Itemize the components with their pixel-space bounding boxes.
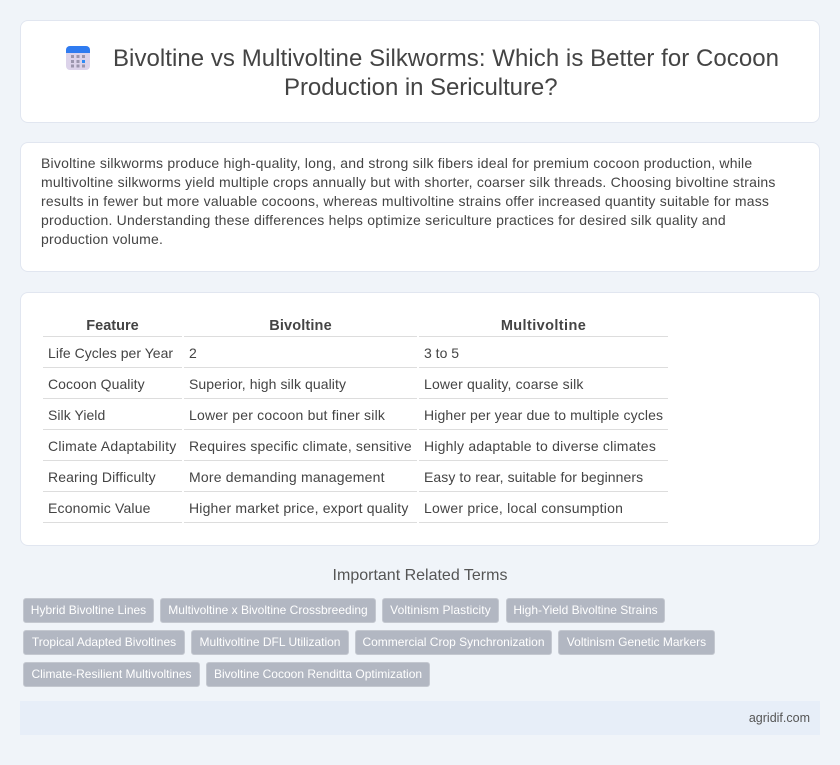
comparison table: Lower per cocoon but finer silk — [189, 407, 385, 423]
related term tags: Tropical Adapted Bivoltines — [32, 635, 176, 649]
comparison table: More demanding management — [189, 469, 385, 485]
comparison table: Feature — [86, 318, 139, 334]
comparison table: Life Cycles per Year — [48, 345, 173, 361]
comparison table: Bivoltine — [269, 318, 332, 334]
comparison table: Cocoon Quality — [48, 376, 145, 392]
related term tags: Commercial Crop Synchronization — [362, 635, 545, 649]
icon: calendar — [66, 46, 90, 70]
related term tags: Voltinism Plasticity — [390, 603, 491, 617]
related term tags: Hybrid Bivoltine Lines — [31, 603, 146, 617]
title line 2: Production in Sericulture? — [284, 74, 558, 101]
comparison table: Rearing Difficulty — [48, 469, 156, 485]
related term tags: Multivoltine DFL Utilization — [200, 635, 340, 649]
panel: summary — [20, 142, 820, 272]
summary text — [41, 155, 776, 247]
related term tags: Voltinism Genetic Markers — [567, 635, 706, 649]
footer bar — [20, 701, 820, 735]
comparison table: Lower quality, coarse silk — [424, 376, 584, 392]
comparison table: Higher per year due to multiple cycles — [424, 407, 663, 423]
comparison table: Superior, high silk quality — [189, 376, 346, 392]
comparison table: Requires specific climate, sensitive — [189, 438, 412, 454]
related term tags — [23, 598, 715, 687]
related term tags: Bivoltine Cocoon Renditta Optimization — [214, 667, 422, 681]
comparison table: 3 to 5 — [424, 345, 459, 361]
comparison table — [43, 318, 668, 523]
heading: related terms: Important Related Terms — [333, 567, 507, 584]
footer source text: agridif.com — [749, 711, 810, 725]
summary text: production volume. — [41, 231, 163, 247]
comparison table: Highly adaptable to diverse climates — [424, 438, 656, 454]
related term tags: Climate-Resilient Multivoltines — [31, 667, 192, 681]
summary text: multivoltine silkworms yield multiple crops annually but with shorter, coarser silk threads. Choosing bivoltine strains — [41, 174, 776, 190]
panel: comparison table — [20, 292, 820, 546]
comparison table: Higher market price, export quality — [189, 500, 408, 516]
title line 1: Bivoltine vs Multivoltine Silkworms: Which is Better for Cocoon — [113, 45, 779, 72]
comparison table: Climate Adaptability — [48, 438, 177, 454]
comparison table: Economic Value — [48, 500, 151, 516]
panel: title header — [20, 20, 820, 123]
comparison table: Multivoltine — [501, 318, 586, 334]
related term tags: High-Yield Bivoltine Strains — [513, 603, 658, 617]
summary text: production. Understanding these differences helps optimize sericulture practices for desired silk quality and — [41, 212, 726, 228]
comparison table: Silk Yield — [48, 407, 105, 423]
related term tags: Multivoltine x Bivoltine Crossbreeding — [168, 603, 368, 617]
comparison table: 2 — [189, 345, 197, 361]
summary text: Bivoltine silkworms produce high-quality, long, and strong silk fibers ideal for premium cocoon production, while — [41, 155, 752, 171]
summary text: results in fewer but more valuable cocoons, whereas multivoltine strains offer increased quantity suitable for mass — [41, 193, 769, 209]
comparison table: Easy to rear, suitable for beginners — [424, 469, 643, 485]
comparison table: Lower price, local consumption — [424, 500, 623, 516]
